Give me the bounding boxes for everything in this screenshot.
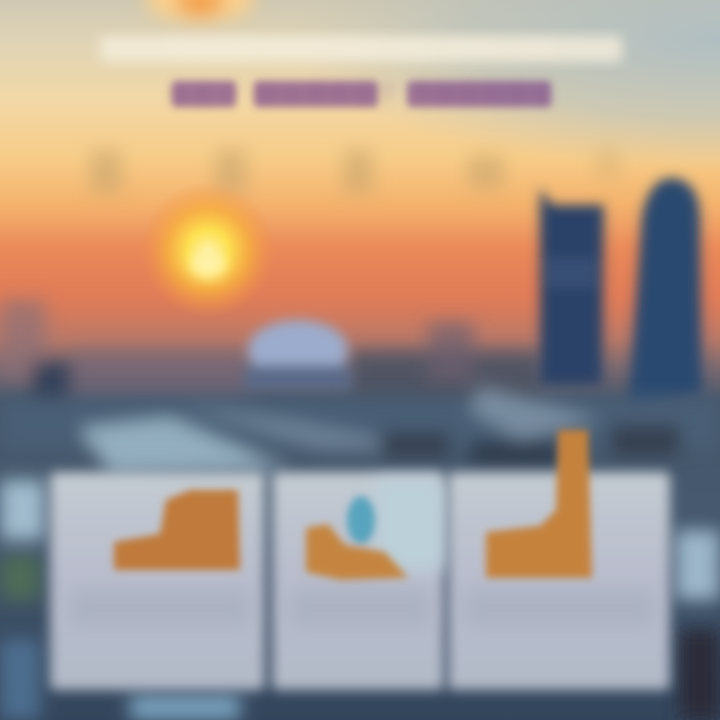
tower left bbox=[540, 188, 604, 385]
panel: right card bbox=[448, 430, 670, 690]
panel: middle card bbox=[272, 472, 445, 690]
chart: middle orange bars bbox=[306, 524, 408, 580]
text block placeholders under charts bbox=[70, 590, 655, 626]
tower right bbox=[628, 178, 702, 410]
dome building bbox=[245, 320, 351, 391]
setting sun bbox=[140, 182, 276, 318]
distant skyline bbox=[0, 300, 540, 410]
icon: teal marker bbox=[347, 496, 375, 544]
panel: left card bbox=[50, 472, 265, 690]
chart: left orange bars bbox=[114, 490, 240, 570]
heading: key market trends: KEY MARKET TRENDS bbox=[171, 79, 551, 109]
glow band at the horizon bbox=[0, 240, 720, 320]
faint column labels in the sky bbox=[90, 150, 621, 194]
chart: right orange bars bbox=[486, 430, 592, 578]
city blocks below skyline bbox=[0, 385, 720, 720]
title banner bbox=[100, 35, 622, 62]
icon: small sun at top bbox=[145, 0, 255, 22]
title banner: MARKET OVERVIEW AND ANALYSIS bbox=[167, 35, 553, 60]
